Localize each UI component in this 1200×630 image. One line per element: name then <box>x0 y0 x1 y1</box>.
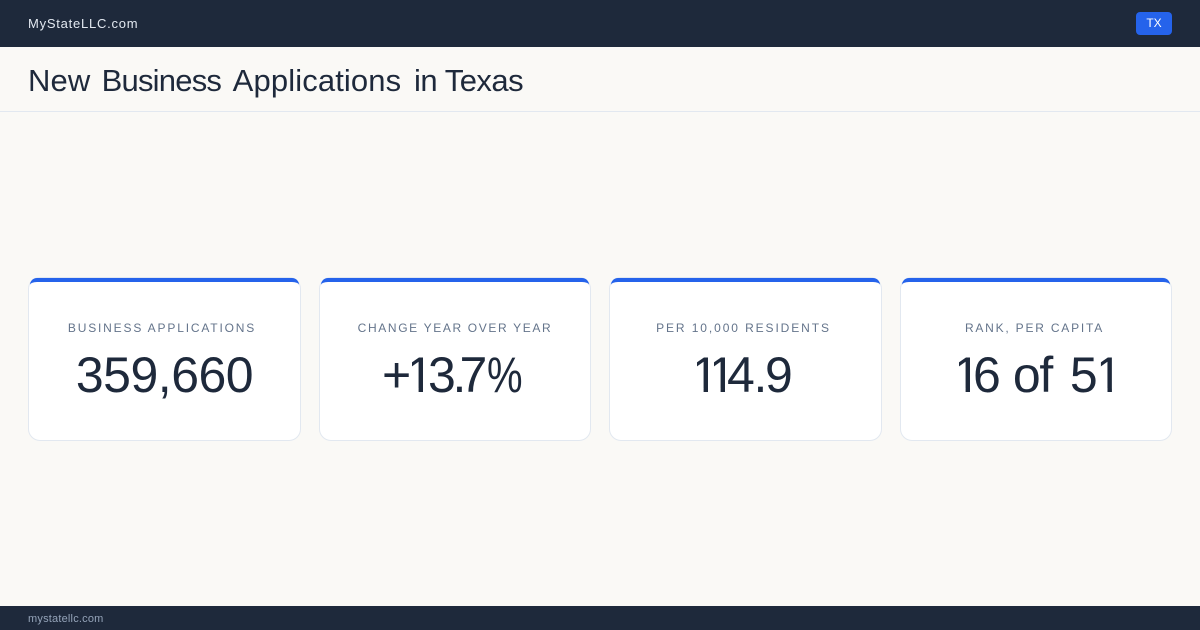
brand name: MyStateLLC.com <box>28 16 138 31</box>
footer url: mystatellc.com <box>28 613 104 625</box>
value: rank per capita: o <box>1013 347 1041 403</box>
label: rank per capita: RANK, PER CAPITA <box>965 321 1104 335</box>
label: change year over year: CHANGE YEAR OVER YEAR <box>358 321 552 335</box>
value: per 10,000 residents: 9 <box>765 347 793 403</box>
value: change year over year <box>382 347 523 403</box>
value: change year over year: . <box>452 347 466 403</box>
state badge <box>1136 12 1172 35</box>
value: per 10,000 residents: 4 <box>727 347 755 403</box>
value: change year over year: 3 <box>428 347 456 403</box>
label: business applications: BUSINESS APPLICATIONS <box>68 321 256 335</box>
state badge: TX <box>1146 16 1162 30</box>
value: change year over year: + <box>382 347 411 403</box>
panel: change year over year <box>319 277 591 441</box>
value: rank per capita: 1 <box>953 347 981 403</box>
value: rank per capita <box>959 347 1112 403</box>
value: per 10,000 residents: . <box>754 347 767 403</box>
panel: per 10,000 residents <box>609 277 882 441</box>
value: change year over year: % <box>487 347 523 403</box>
footer bar <box>0 606 1200 630</box>
value: rank per capita: 6 <box>973 347 1001 403</box>
value: change year over year: 7 <box>460 347 487 403</box>
value: rank per capita: f <box>1039 347 1053 403</box>
title: New Business Applications in Texas <box>28 63 523 98</box>
value: change year over year: 1 <box>406 347 434 403</box>
value: rank per capita: 5 <box>1070 347 1098 403</box>
value: per 10,000 residents <box>697 347 793 403</box>
top navigation bar <box>0 0 1200 47</box>
value: per 10,000 residents: 1 <box>708 347 736 403</box>
page header <box>0 47 1200 112</box>
panel: rank per capita <box>900 277 1172 441</box>
value: per 10,000 residents: 1 <box>691 347 719 403</box>
panel: business applications <box>28 277 301 441</box>
value: rank per capita: 1 <box>1095 347 1123 403</box>
label: per 10,000 residents: PER 10,000 RESIDENTS <box>656 321 831 335</box>
value: business applications: 359,660 <box>76 347 253 403</box>
